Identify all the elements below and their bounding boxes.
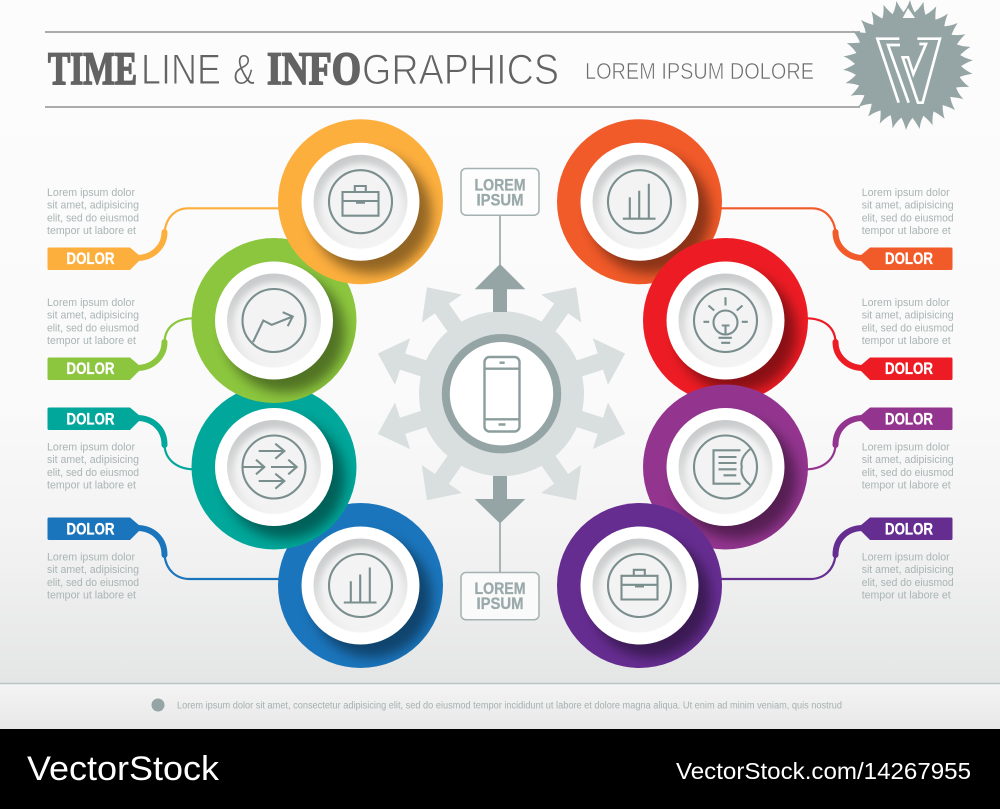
connector and tag: dark purple xyxy=(720,518,952,579)
text block: left 1: elit, sed do eiusmod xyxy=(47,212,139,224)
text block: right 1: elit, sed do eiusmod xyxy=(862,212,954,224)
text block: right 2 xyxy=(862,297,954,347)
text block: right 1 xyxy=(862,187,954,237)
text block: right 3 xyxy=(862,442,954,492)
connector and tag: blue xyxy=(48,518,280,579)
text block: right 3: tempor ut labore et xyxy=(862,480,951,492)
title: INFO xyxy=(267,44,361,95)
text block: right 2: tempor ut labore et xyxy=(862,335,951,347)
text block: left 3: sit amet, adipisicing xyxy=(47,454,139,466)
text block: right 2: elit, sed do eiusmod xyxy=(862,322,954,334)
text block: left 4 xyxy=(47,552,139,602)
text block: left 2: Lorem ipsum dolor xyxy=(47,297,135,309)
connector and tag: purple xyxy=(806,408,952,469)
connector and tag: teal: DOLOR xyxy=(66,410,115,428)
footer strip: Lorem ipsum dolor sit amet, consectetur adipisicing elit, sed do eiusmod tempor incididunt ut labore et dolore magna aliqua. Ut enim ad minim veniam, quis nostrud xyxy=(177,700,842,712)
connector and tag: red xyxy=(806,318,952,380)
circle: dark purple, briefcase icon xyxy=(557,503,722,668)
text block: right 3: sit amet, adipisicing xyxy=(862,454,954,466)
circle: red, light bulb icon xyxy=(643,238,808,403)
text block: right 4: elit, sed do eiusmod xyxy=(862,577,954,589)
connector and tag: green xyxy=(48,318,194,380)
icon: smartphone xyxy=(484,357,520,432)
text block: left 2: elit, sed do eiusmod xyxy=(47,322,139,334)
circle: green, growth chart icon xyxy=(192,238,356,403)
circle: blue, bar chart icon xyxy=(278,503,443,668)
connector and tag: purple: DOLOR xyxy=(885,410,933,428)
text block: right 1: sit amet, adipisicing xyxy=(862,200,954,212)
text block: right 4: Lorem ipsum dolor xyxy=(862,552,950,564)
text block: right 4: sit amet, adipisicing xyxy=(862,564,954,576)
title: LINE xyxy=(141,46,221,94)
text block: left 1: Lorem ipsum dolor xyxy=(47,187,135,199)
footer strip xyxy=(0,684,1000,729)
watermark band xyxy=(0,729,1000,809)
text block: right 2: Lorem ipsum dolor xyxy=(862,297,950,309)
watermark band: VectorStock.com/14267955 xyxy=(676,758,971,784)
text block: left 3: tempor ut labore et xyxy=(47,480,136,492)
text block: left 4: sit amet, adipisicing xyxy=(47,564,139,576)
title: TIME xyxy=(48,44,137,95)
text block: right 4 xyxy=(862,552,954,602)
circle: red-orange, bar chart icon xyxy=(557,119,722,284)
text block: left 3 xyxy=(47,442,139,492)
connector and tag: orange: DOLOR xyxy=(66,250,115,268)
connector and tag: red-orange: DOLOR xyxy=(885,250,933,268)
connector and tag: dark purple: DOLOR xyxy=(885,520,933,538)
text block: right 2: sit amet, adipisicing xyxy=(862,310,954,322)
arrow: up to top label xyxy=(475,215,525,312)
text block: right 3: Lorem ipsum dolor xyxy=(862,442,950,454)
text block: right 3: elit, sed do eiusmod xyxy=(862,467,954,479)
title xyxy=(48,44,559,95)
arrow: down to bottom label xyxy=(475,476,525,572)
text block: left 2 xyxy=(47,297,139,347)
text block: left 3: elit, sed do eiusmod xyxy=(47,467,139,479)
logo badge xyxy=(843,0,973,130)
text block: left 4: elit, sed do eiusmod xyxy=(47,577,139,589)
label box: bottom xyxy=(461,572,539,620)
text block: right 1: tempor ut labore et xyxy=(862,225,951,237)
title: & xyxy=(233,46,255,94)
text block: left 2: sit amet, adipisicing xyxy=(47,310,139,322)
label box: top xyxy=(461,168,539,215)
text block: right 1: Lorem ipsum dolor xyxy=(862,187,950,199)
title: GRAPHICS xyxy=(362,46,559,94)
connector and tag: green: DOLOR xyxy=(66,360,115,378)
connector and tag: teal xyxy=(48,408,194,469)
central hub with radiating arrows xyxy=(370,273,633,514)
label box: bottom: LOREM xyxy=(474,580,526,598)
text block: right 4: tempor ut labore et xyxy=(862,590,951,602)
circle: teal, flow arrows icon xyxy=(192,384,356,550)
text block: left 1 xyxy=(47,187,139,237)
label box: top: IPSUM xyxy=(476,192,524,210)
text block: left 1: tempor ut labore et xyxy=(47,225,136,237)
circle: orange, briefcase icon xyxy=(278,119,443,284)
label box: bottom: IPSUM xyxy=(476,595,524,613)
connector and tag: orange xyxy=(48,208,280,270)
watermark band: VectorStock xyxy=(27,750,220,788)
text block: left 2: tempor ut labore et xyxy=(47,335,136,347)
circle: purple, document icon xyxy=(643,384,808,550)
subtitle: LOREM IPSUM DOLORE xyxy=(585,58,814,84)
text block: left 4: Lorem ipsum dolor xyxy=(47,552,135,564)
text block: left 3: Lorem ipsum dolor xyxy=(47,442,135,454)
connector and tag: red: DOLOR xyxy=(885,360,933,378)
label box: top: LOREM xyxy=(474,177,526,195)
connector and tag: blue: DOLOR xyxy=(66,520,115,538)
text block: left 1: sit amet, adipisicing xyxy=(47,200,139,212)
connector and tag: red-orange xyxy=(720,208,952,270)
text block: left 4: tempor ut labore et xyxy=(47,590,136,602)
